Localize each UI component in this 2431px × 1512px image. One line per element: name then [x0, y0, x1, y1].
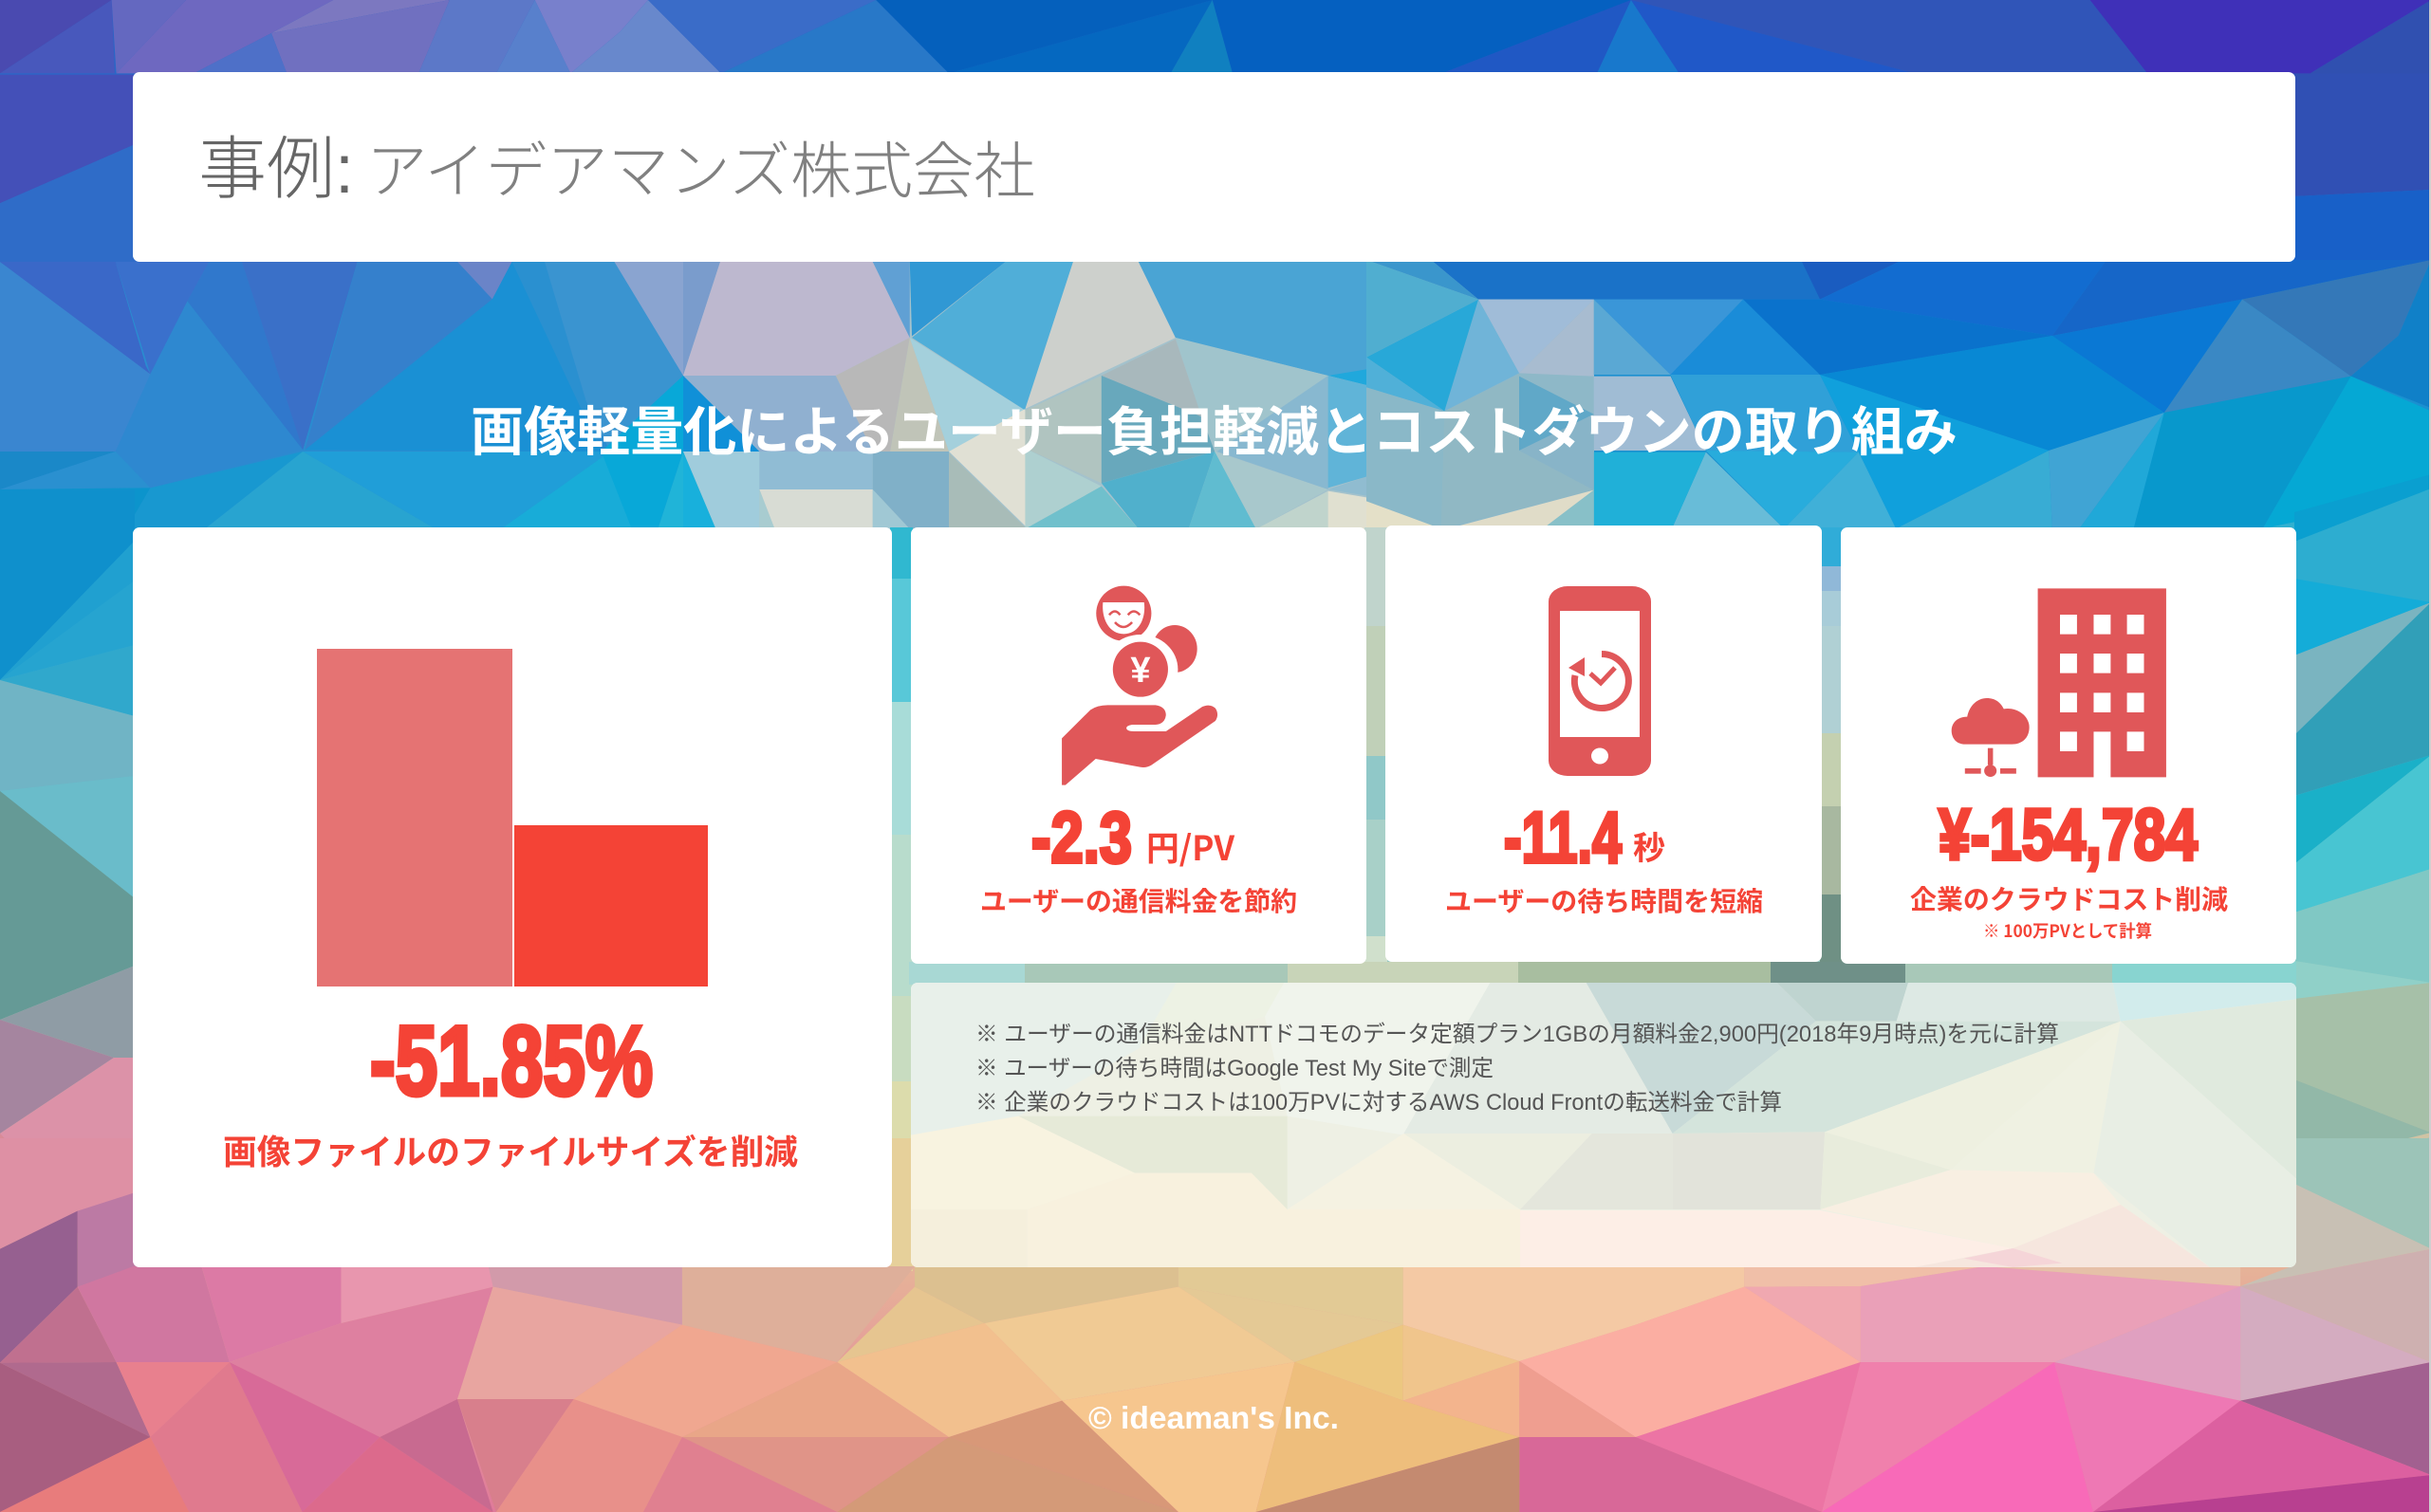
margin facets beside the header — [0, 67, 2431, 265]
stat: waiting time: -11.4 — [1504, 798, 1622, 878]
panel: waiting time — [1385, 526, 1822, 962]
icon: phone with clock — [1549, 586, 1651, 776]
gaps between cards — [890, 527, 2296, 1271]
stat: waiting time: 秒 — [1633, 822, 1665, 869]
header panel — [133, 72, 2295, 262]
stat: file size: -51.85% — [370, 1006, 653, 1116]
icon: hand with yen coin and smiling face — [1062, 586, 1217, 785]
right margin facets — [2294, 474, 2431, 1233]
section heading: 画像軽量化によるユーザー負担軽減とコストダウンの取り組み — [471, 390, 1958, 467]
caption: data cost: ユーザーの通信料金を節約 — [980, 881, 1297, 919]
middle band facets, centre — [683, 262, 1366, 529]
note lines: ※ ユーザーの待ち時間はGoogle Test My Siteで測定 — [975, 1056, 1494, 1081]
title: アイデアマンズ株式会社 — [366, 138, 1035, 206]
top band facets — [0, 0, 2431, 73]
footnote: cloud cost: ※ 100万PVとして計算 — [1983, 918, 2152, 943]
stat: cloud cost: ¥-154,784 — [1939, 795, 2198, 876]
left margin facets — [0, 489, 135, 1233]
caption: cloud cost: 企業のクラウドコスト削減 — [1910, 879, 2228, 917]
caption: waiting time: ユーザーの待ち時間を短縮 — [1445, 881, 1763, 919]
caption: file size: 画像ファイルのファイルサイズを削減 — [223, 1125, 798, 1174]
stat: data cost: -2.3 — [1031, 798, 1132, 878]
stat: data cost — [1031, 798, 1235, 878]
panel: file size reduction — [133, 527, 892, 1267]
icon: hand with yen coin and smiling face: ¥ — [1130, 651, 1151, 691]
stat: data cost: 円/PV — [1146, 821, 1235, 871]
title: 事例: — [198, 132, 354, 208]
note lines: ※ ユーザーの通信料金はNTTドコモのデータ定額プラン1GBの月額料金2,900円(2018年9月時点)を元に計算 — [975, 1022, 2059, 1047]
panel: data cost — [911, 527, 1366, 964]
bar chart: before and after — [317, 649, 708, 986]
panel: cloud cost — [1841, 527, 2296, 964]
icon: cloud and office building — [1952, 588, 2166, 777]
middle band facets, right — [1366, 260, 2431, 528]
middle band facets, left — [0, 262, 683, 529]
panel: notes — [911, 977, 2297, 1267]
footer copyright: © ideaman's Inc. — [1088, 1400, 1339, 1435]
lower facets — [0, 1138, 2431, 1512]
note lines: ※ 企業のクラウドコストは100万PVに対するAWS Cloud Frontの転送料金で計算 — [975, 1090, 1782, 1116]
note lines — [975, 1022, 2059, 1116]
